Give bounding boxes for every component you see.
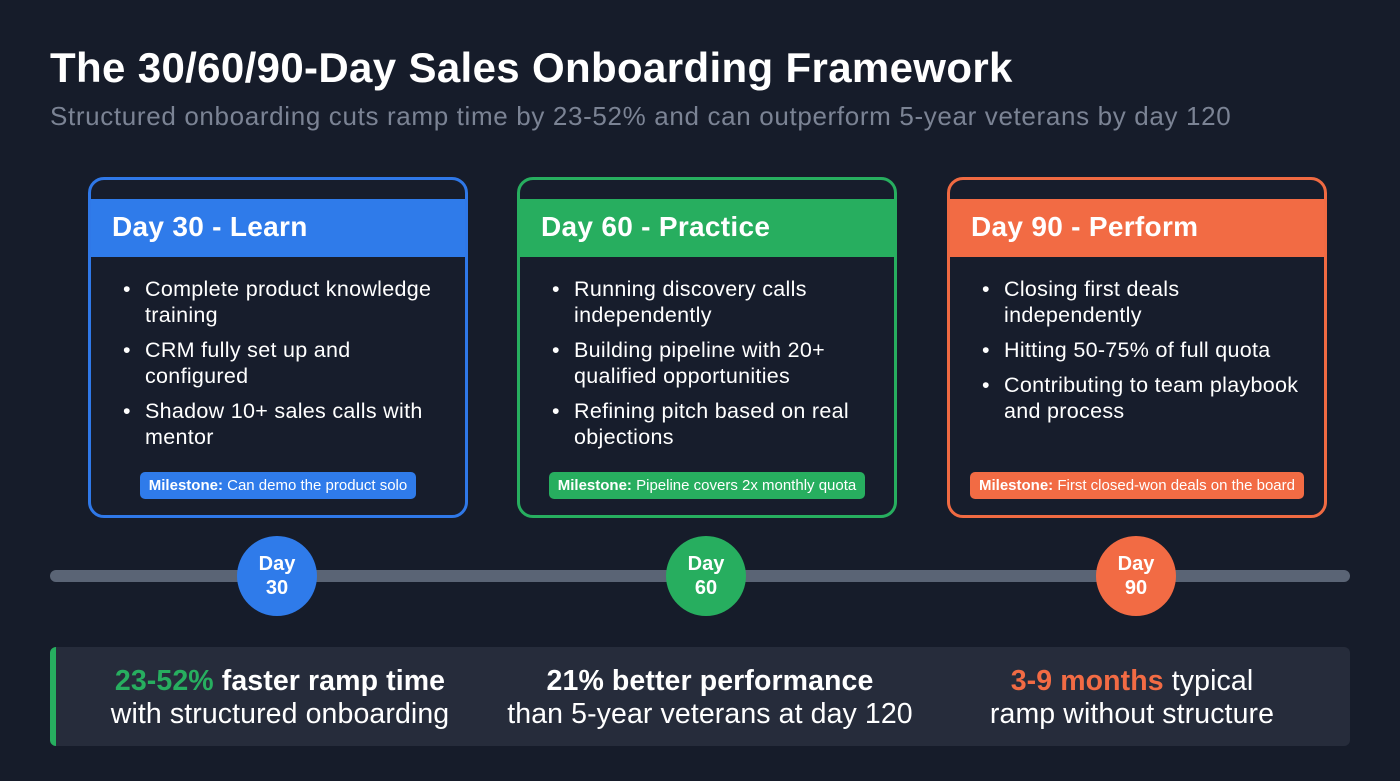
stats panel [50, 647, 1350, 746]
stat: performance: 21% better performance [547, 665, 873, 697]
marker: day 30: Day [259, 553, 295, 575]
marker: day 60: 60 [695, 577, 717, 599]
stat: typical ramp: ramp without structure [990, 698, 1274, 730]
marker: day 60 [666, 536, 746, 616]
list: day 60: Running discovery calls independently [574, 277, 807, 327]
list: day 60 [552, 277, 849, 449]
header: day 30 [91, 199, 465, 257]
stat: typical ramp: 3-9 months typical [1011, 665, 1253, 697]
panel: day 60 [517, 177, 897, 518]
timeline bar [50, 570, 1350, 582]
title: The 30/60/90-Day Sales Onboarding Framework [50, 44, 1013, 91]
list: day 90: Closing first deals independently [1004, 277, 1179, 327]
list: day 90: Contributing to team playbook and process [1004, 373, 1298, 423]
stat: performance: than 5-year veterans at day 120 [507, 698, 913, 730]
list: day 60: Building pipeline with 20+ qualified opportunities [574, 338, 825, 388]
subtitle: Structured onboarding cuts ramp time by 23-52% and can outperform 5-year veterans by day 120 [50, 101, 1231, 131]
stat: ramp time [110, 665, 449, 730]
header: day 90 [950, 199, 1324, 257]
milestone: day 30: Milestone: Can demo the product solo [149, 477, 407, 494]
list: day 30 [124, 277, 431, 449]
panel: day 30 [88, 177, 468, 518]
stat: typical ramp [990, 665, 1274, 730]
marker: day 90 [1096, 536, 1176, 616]
marker: day 30: 30 [266, 577, 288, 599]
marker: day 30 [237, 536, 317, 616]
stat: ramp time: 23-52% faster ramp time [115, 665, 445, 697]
list: day 30: CRM fully set up and configured [145, 338, 351, 388]
marker: day 60: Day [688, 553, 724, 575]
list: day 30: Complete product knowledge training [145, 277, 431, 327]
stat: performance [507, 665, 913, 730]
milestone: day 90: Milestone: First closed-won deals on the board [979, 477, 1295, 494]
marker: day 90: Day [1118, 553, 1154, 575]
header: day 30: Day 30 - Learn [112, 211, 308, 242]
list: day 90: Hitting 50-75% of full quota [1004, 338, 1271, 362]
list: day 30: Shadow 10+ sales calls with mentor [145, 399, 423, 449]
milestone: day 60: Milestone: Pipeline covers 2x monthly quota [558, 477, 856, 494]
list: day 60: Refining pitch based on real objections [574, 399, 849, 449]
header: day 60: Day 60 - Practice [541, 211, 770, 242]
panel: day 90 [947, 177, 1327, 518]
stat: ramp time: with structured onboarding [111, 698, 449, 730]
header: day 60 [520, 199, 894, 257]
list: day 90 [982, 277, 1298, 423]
header: day 90: Day 90 - Perform [971, 211, 1198, 242]
marker: day 90: 90 [1125, 577, 1147, 599]
